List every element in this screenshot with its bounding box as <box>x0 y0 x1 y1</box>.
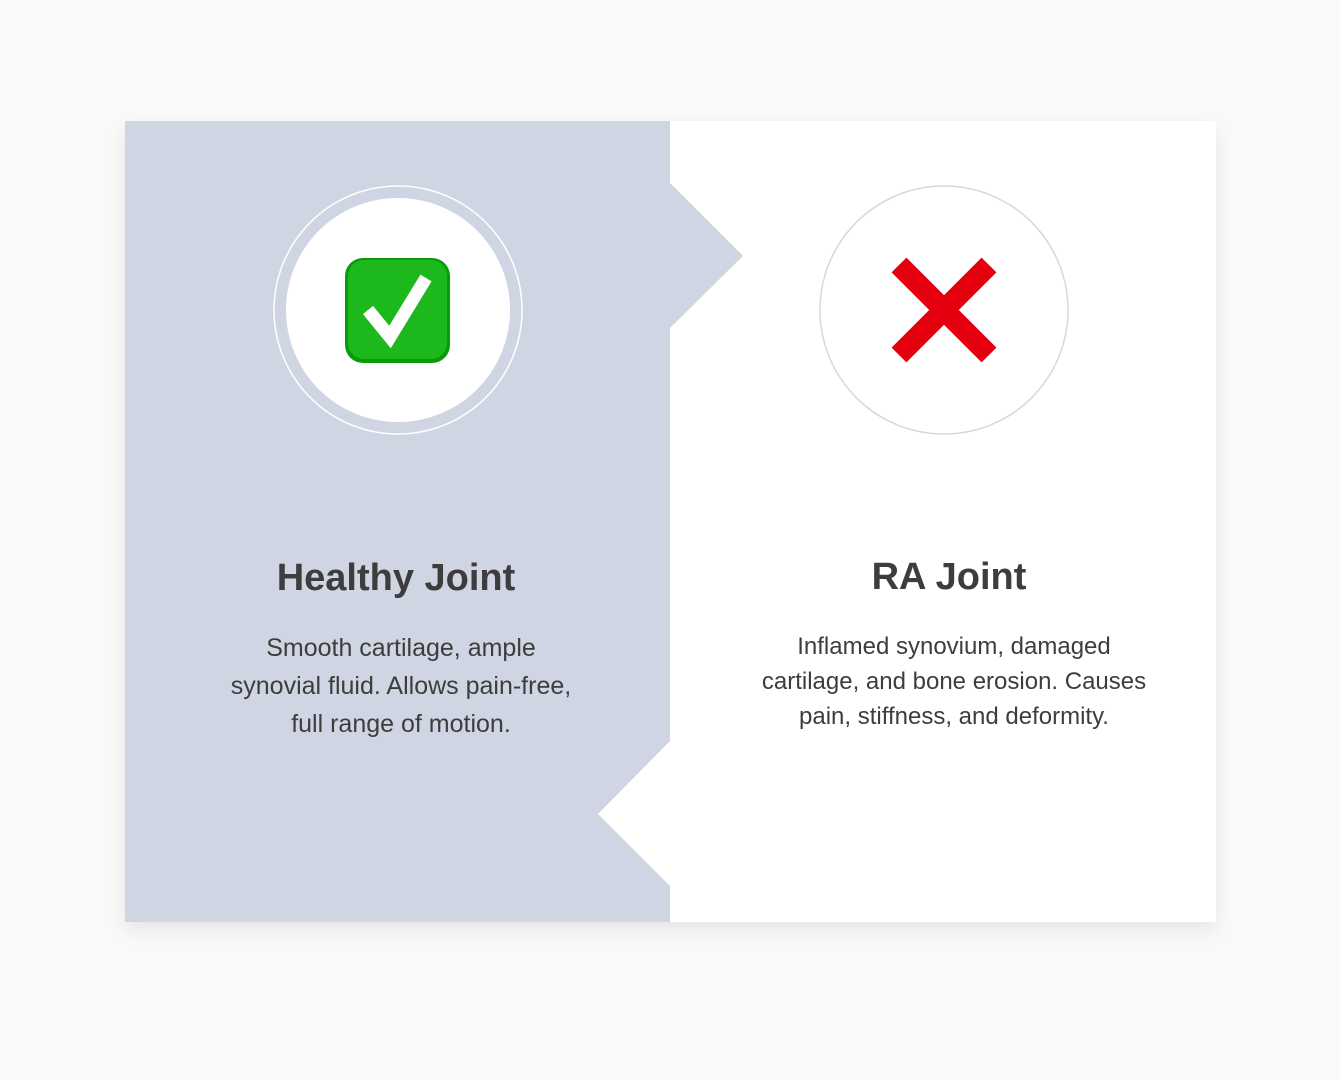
text: RA description: cartilage, and bone erosion. Causes <box>762 668 1146 695</box>
text: healthy description: Smooth cartilage, ample <box>266 634 536 662</box>
text: RA description <box>762 633 1146 730</box>
text: healthy description: synovial fluid. Allows pain-free, <box>231 672 571 700</box>
icon: RA cross circle <box>819 185 1069 435</box>
text: healthy description: full range of motion. <box>291 710 511 738</box>
icon: healthy check circle <box>273 185 523 435</box>
heading: RA Joint: RA Joint <box>872 556 1026 598</box>
heading: Healthy Joint: Healthy Joint <box>277 557 515 599</box>
panel: healthy background with notches <box>125 121 743 922</box>
text: RA description: pain, stiffness, and deformity. <box>799 703 1109 730</box>
text: RA description: Inflamed synovium, damaged <box>797 633 1111 660</box>
text: healthy description <box>231 634 571 738</box>
card <box>125 121 1216 922</box>
